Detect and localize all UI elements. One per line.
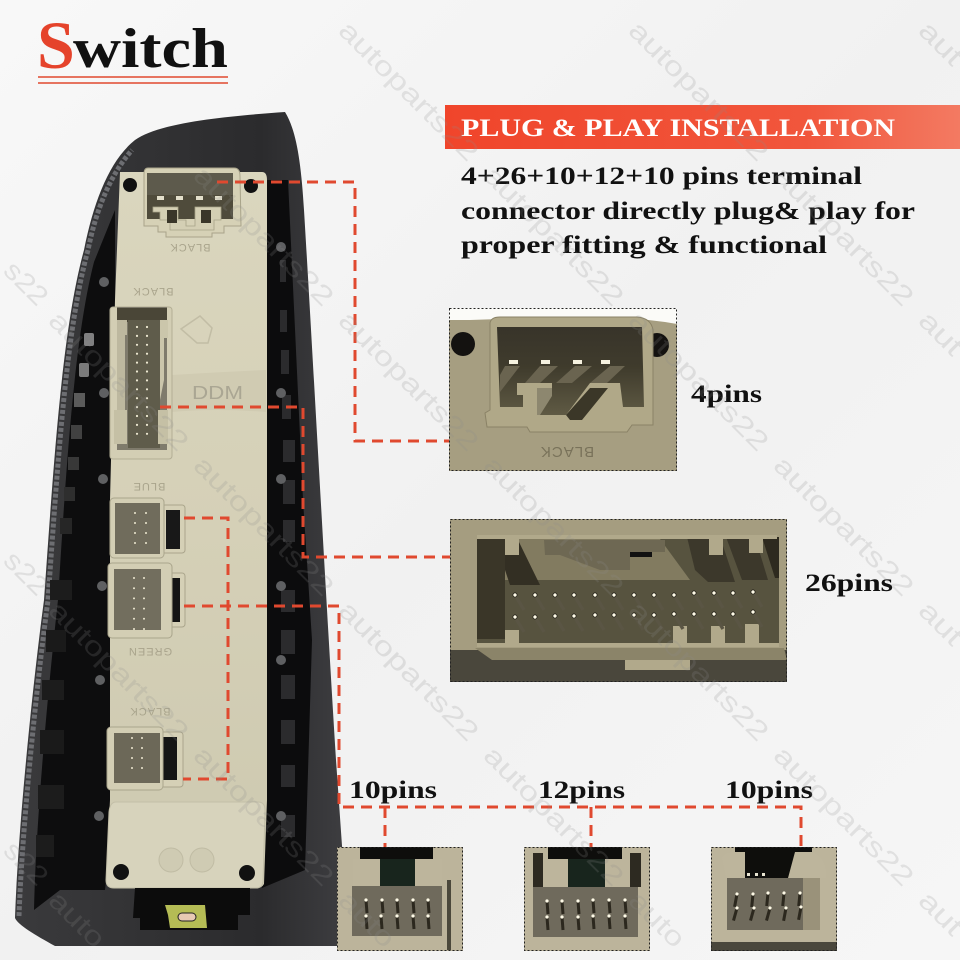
inset: 4 pin connector: BLACK bbox=[540, 443, 594, 460]
date stamps bbox=[159, 848, 214, 872]
watermarks: autoparts22 bbox=[768, 740, 920, 892]
labels for inset pin counts: 10pins bbox=[725, 777, 813, 804]
watermarks: auto bbox=[623, 885, 691, 954]
watermarks: autoparts22 bbox=[333, 595, 485, 747]
connector: black 10 pin bbox=[107, 727, 183, 790]
connector: green 12 pin bbox=[108, 563, 185, 638]
embossed labels bbox=[128, 241, 211, 717]
banner: plug and play: PLUG & PLAY INSTALLATION bbox=[461, 115, 895, 142]
inset: 12 pin connector bbox=[524, 847, 650, 951]
right dark channel bbox=[262, 180, 312, 888]
watermarks: autoparts22 bbox=[478, 160, 630, 312]
DDM label tab bbox=[172, 370, 266, 412]
inset frame bbox=[712, 848, 836, 950]
beige module panel bbox=[106, 172, 267, 888]
watermarks: auto bbox=[43, 885, 111, 954]
watermarks: aut bbox=[913, 15, 960, 72]
labels for inset pin counts: 10pins bbox=[349, 777, 437, 804]
left dark channel bbox=[34, 210, 115, 910]
watermarks: autoparts22 bbox=[623, 595, 775, 747]
watermarks: autoparts22 bbox=[768, 160, 920, 312]
description text bbox=[461, 163, 915, 259]
watermarks: autoparts22 bbox=[188, 450, 340, 602]
device photo: window switch bbox=[15, 112, 343, 946]
textured left edge bbox=[19, 150, 132, 916]
embossed labels: BLACK bbox=[132, 285, 174, 297]
embossed labels: BLACK bbox=[129, 705, 171, 717]
embossed labels: GREEN bbox=[128, 645, 172, 657]
inset: left 10 pin connector bbox=[337, 847, 463, 951]
inset frame bbox=[450, 520, 786, 682]
watermarks: autoparts22 bbox=[768, 450, 920, 602]
mounting pegs bbox=[94, 242, 286, 821]
watermarks: autoparts22 bbox=[478, 450, 630, 602]
title: Switch: witch bbox=[73, 18, 228, 80]
housing bbox=[15, 112, 343, 946]
mounting holes bbox=[113, 178, 258, 881]
watermarks: autoparts22 bbox=[478, 740, 630, 892]
inset: 26 pin connector bbox=[450, 519, 787, 682]
inset frame bbox=[524, 848, 650, 950]
watermarks: aut bbox=[913, 305, 960, 362]
lower black recess bbox=[133, 888, 250, 930]
inset frame bbox=[338, 848, 462, 950]
end cap bbox=[106, 802, 265, 888]
labels for inset pin counts bbox=[349, 381, 893, 804]
embossed labels: BLUE bbox=[133, 480, 165, 492]
right channel rungs bbox=[280, 260, 295, 837]
watermarks: aut bbox=[913, 595, 960, 652]
description text: connector directly plug& play for bbox=[461, 198, 915, 225]
title: Switch bbox=[37, 7, 228, 83]
dashed leader lines bbox=[160, 182, 801, 847]
inset frame bbox=[450, 308, 676, 470]
title: Switch: S bbox=[37, 7, 75, 83]
inset: 4 pin connector bbox=[449, 308, 677, 471]
labels for inset pin counts: 12pins bbox=[538, 777, 625, 804]
watermarks: autoparts22 bbox=[623, 15, 775, 167]
inset: right 10 pin connector bbox=[711, 847, 837, 951]
watermarks: autoparts22 bbox=[623, 305, 775, 457]
watermarks: aut bbox=[913, 885, 960, 942]
metal clip bbox=[165, 905, 207, 928]
left channel rungs bbox=[36, 333, 94, 857]
connector: 4 pin bbox=[144, 168, 241, 237]
watermarks: auto bbox=[333, 885, 401, 954]
labels for inset pin counts: 26pins bbox=[805, 570, 893, 597]
watermarks: autoparts22 bbox=[43, 595, 195, 747]
watermarks: autoparts22 bbox=[333, 305, 485, 457]
watermarks: autoparts22 bbox=[188, 740, 340, 892]
connector: 26 pin bbox=[110, 307, 172, 459]
title double underline bbox=[38, 77, 228, 83]
banner: plug and play bbox=[445, 105, 960, 149]
watermarks: autoparts22 bbox=[333, 15, 485, 167]
labels for inset pin counts: 4pins bbox=[691, 381, 762, 408]
DDM label tab: DDM bbox=[192, 383, 243, 403]
watermarks: autoparts22 bbox=[188, 160, 340, 312]
embossed labels: BLACK bbox=[169, 241, 211, 253]
description text: 4+26+10+12+10 pins terminal bbox=[461, 163, 862, 190]
connector: blue 10 pin bbox=[110, 498, 185, 558]
recycle triangle mark bbox=[181, 316, 212, 343]
watermarks: autoparts22 bbox=[43, 305, 195, 457]
description text: proper fitting & functional bbox=[461, 232, 827, 259]
